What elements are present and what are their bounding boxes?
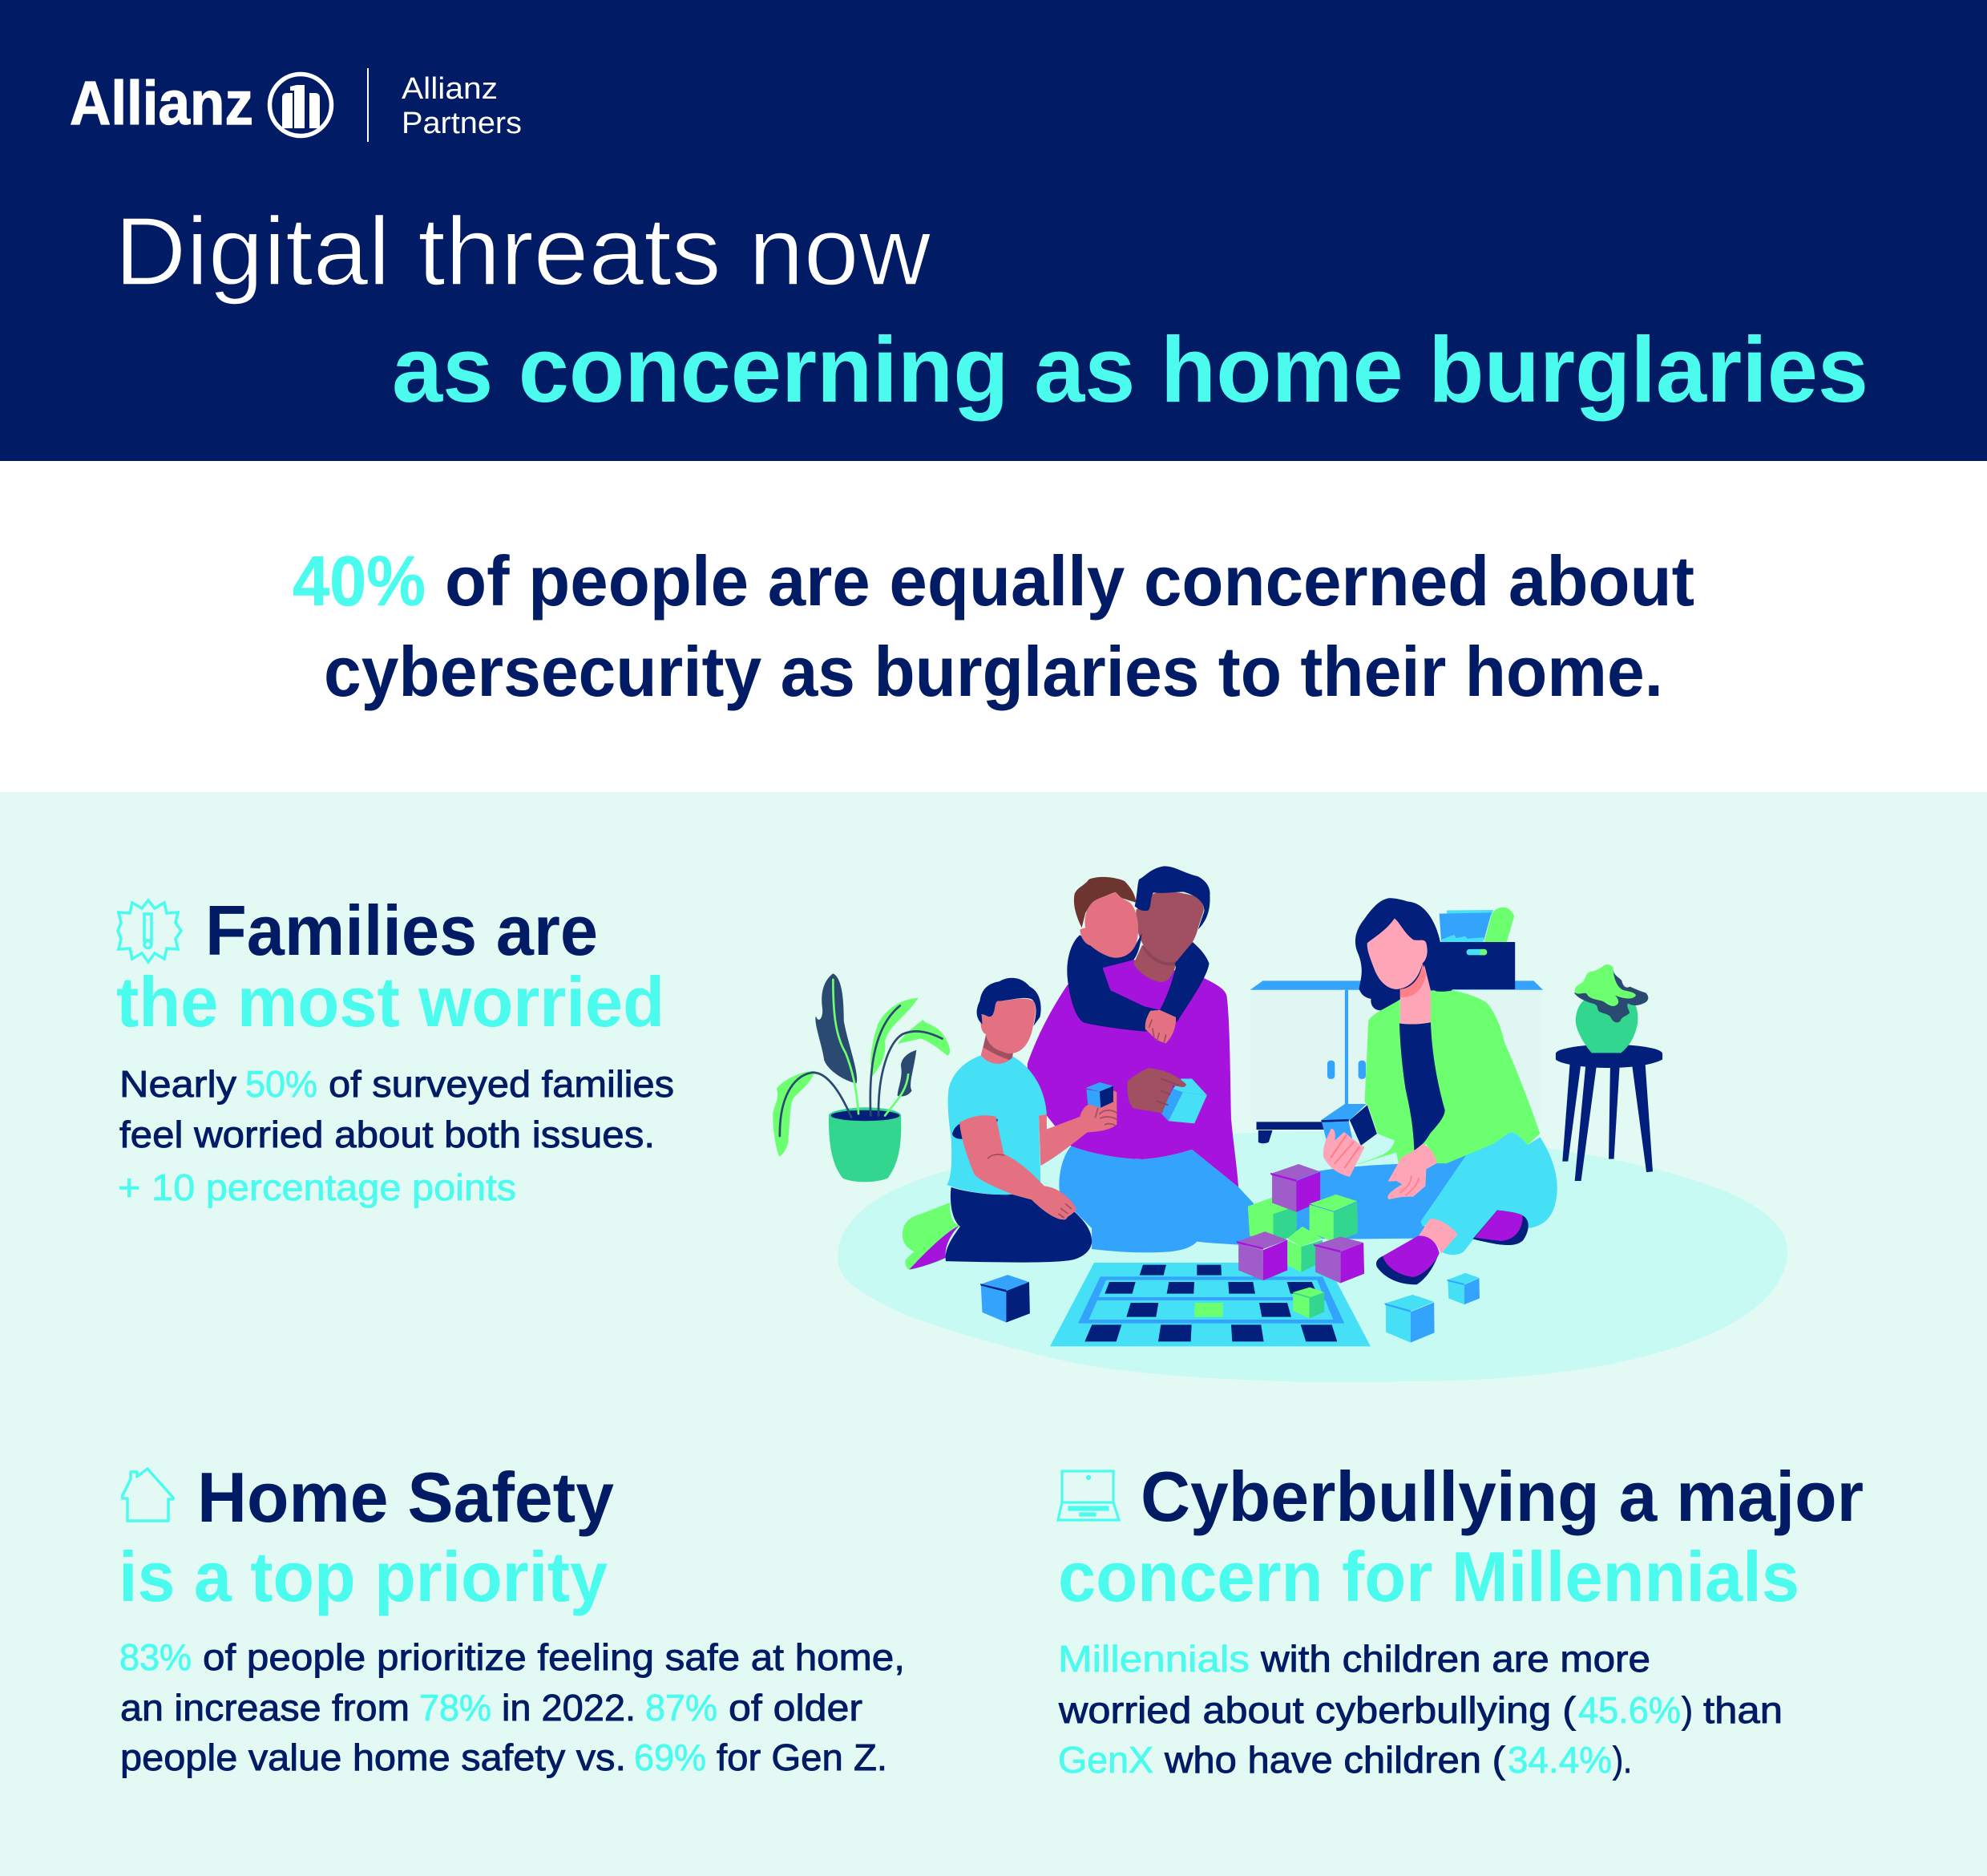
illustration: family playing: [773, 866, 1787, 1382]
heading: cyberbullying: concern for Millennials: [1058, 1537, 1799, 1616]
heading: home safety: Home Safety: [197, 1458, 614, 1537]
panel: header band: [0, 0, 1987, 461]
woman sitting: [1295, 898, 1557, 1284]
father and child on his shoulders: [1028, 866, 1261, 1252]
text block: families: Nearly: [119, 1063, 236, 1105]
text block: families: [118, 1063, 674, 1208]
text block: cyberbullying: with children are more: [1260, 1638, 1650, 1680]
subheading: 40% statistic: cybersecurity as burglaries to their home.: [324, 632, 1663, 711]
logo: Allianz Partners: Allianz: [402, 72, 498, 106]
heading: cyberbullying: [1058, 1457, 1864, 1616]
title line 1: Digital threats now: [115, 196, 931, 305]
toy blocks: [1236, 1164, 1480, 1343]
text block: home safety: [119, 1636, 905, 1778]
icon: house: [123, 1469, 173, 1521]
text block: home safety: 69%: [634, 1737, 706, 1778]
boy sitting: [903, 978, 1117, 1270]
subheading: 40% statistic: [293, 541, 1694, 711]
text block: families: of surveyed families: [329, 1063, 674, 1105]
text block: home safety: people value home safety vs.: [120, 1737, 626, 1778]
text block: cyberbullying: ).: [1613, 1739, 1632, 1781]
text block: cyberbullying: ): [1682, 1689, 1693, 1731]
text block: families: 50%: [245, 1063, 317, 1105]
logo: Allianz Partners: Partners: [402, 107, 522, 140]
text block: cyberbullying: worried about cyberbullying (: [1058, 1689, 1577, 1731]
rug: [838, 1131, 1787, 1382]
text block: home safety: an increase from: [120, 1687, 410, 1728]
text block: families: + 10 percentage points: [118, 1166, 516, 1208]
text block: home safety: 78%: [419, 1687, 491, 1728]
stool: [1556, 1045, 1662, 1181]
cabinet with storage box: [1250, 908, 1543, 1143]
panel: mint background: [0, 792, 1987, 1876]
potted plant: [773, 973, 950, 1182]
panel: cyberbullying: [1058, 1457, 1864, 1781]
heading: home safety: [119, 1458, 614, 1616]
text block: families: feel worried about both issues.: [119, 1114, 655, 1155]
icon: laptop: [1058, 1471, 1119, 1520]
heading: families: Families are: [205, 891, 598, 970]
panel: home safety: [119, 1458, 905, 1778]
icon: alert burst: [118, 900, 181, 962]
logo: Allianz Partners: [70, 68, 522, 142]
logo: Allianz Partners: Allianz: [70, 69, 253, 138]
text block: cyberbullying: 45.6%: [1578, 1689, 1681, 1731]
text block: cyberbullying: 34.4%: [1508, 1739, 1612, 1781]
heading: families: the most worried: [116, 962, 664, 1041]
board game: [1050, 1263, 1371, 1346]
text block: home safety: of people prioritize feeling safe at home,: [203, 1636, 905, 1678]
text block: cyberbullying: Millennials: [1058, 1638, 1250, 1680]
text block: home safety: for Gen Z.: [717, 1737, 887, 1778]
text block: home safety: of older: [729, 1687, 862, 1728]
subheading: 40% statistic: of people are equally concerned about: [445, 541, 1694, 621]
subheading: 40% statistic: 40%: [293, 541, 426, 621]
panel: families are the most worried: [116, 891, 674, 1208]
plant on stool: [1574, 964, 1648, 1053]
text block: cyberbullying: GenX: [1058, 1739, 1153, 1781]
text block: cyberbullying: [1058, 1638, 1783, 1781]
heading: families: [116, 891, 664, 1041]
title line 2: as concerning as home burglaries: [392, 317, 1868, 422]
text block: home safety: in 2022.: [502, 1687, 636, 1728]
text block: home safety: 83%: [119, 1636, 192, 1678]
toy block: navy and blue: [980, 1275, 1030, 1323]
text block: cyberbullying: who have children (: [1164, 1739, 1506, 1781]
heading: home safety: is a top priority: [119, 1537, 608, 1616]
text block: home safety: 87%: [645, 1687, 717, 1728]
text block: cyberbullying: than: [1703, 1689, 1783, 1731]
heading: cyberbullying: Cyberbullying a major: [1141, 1457, 1864, 1536]
